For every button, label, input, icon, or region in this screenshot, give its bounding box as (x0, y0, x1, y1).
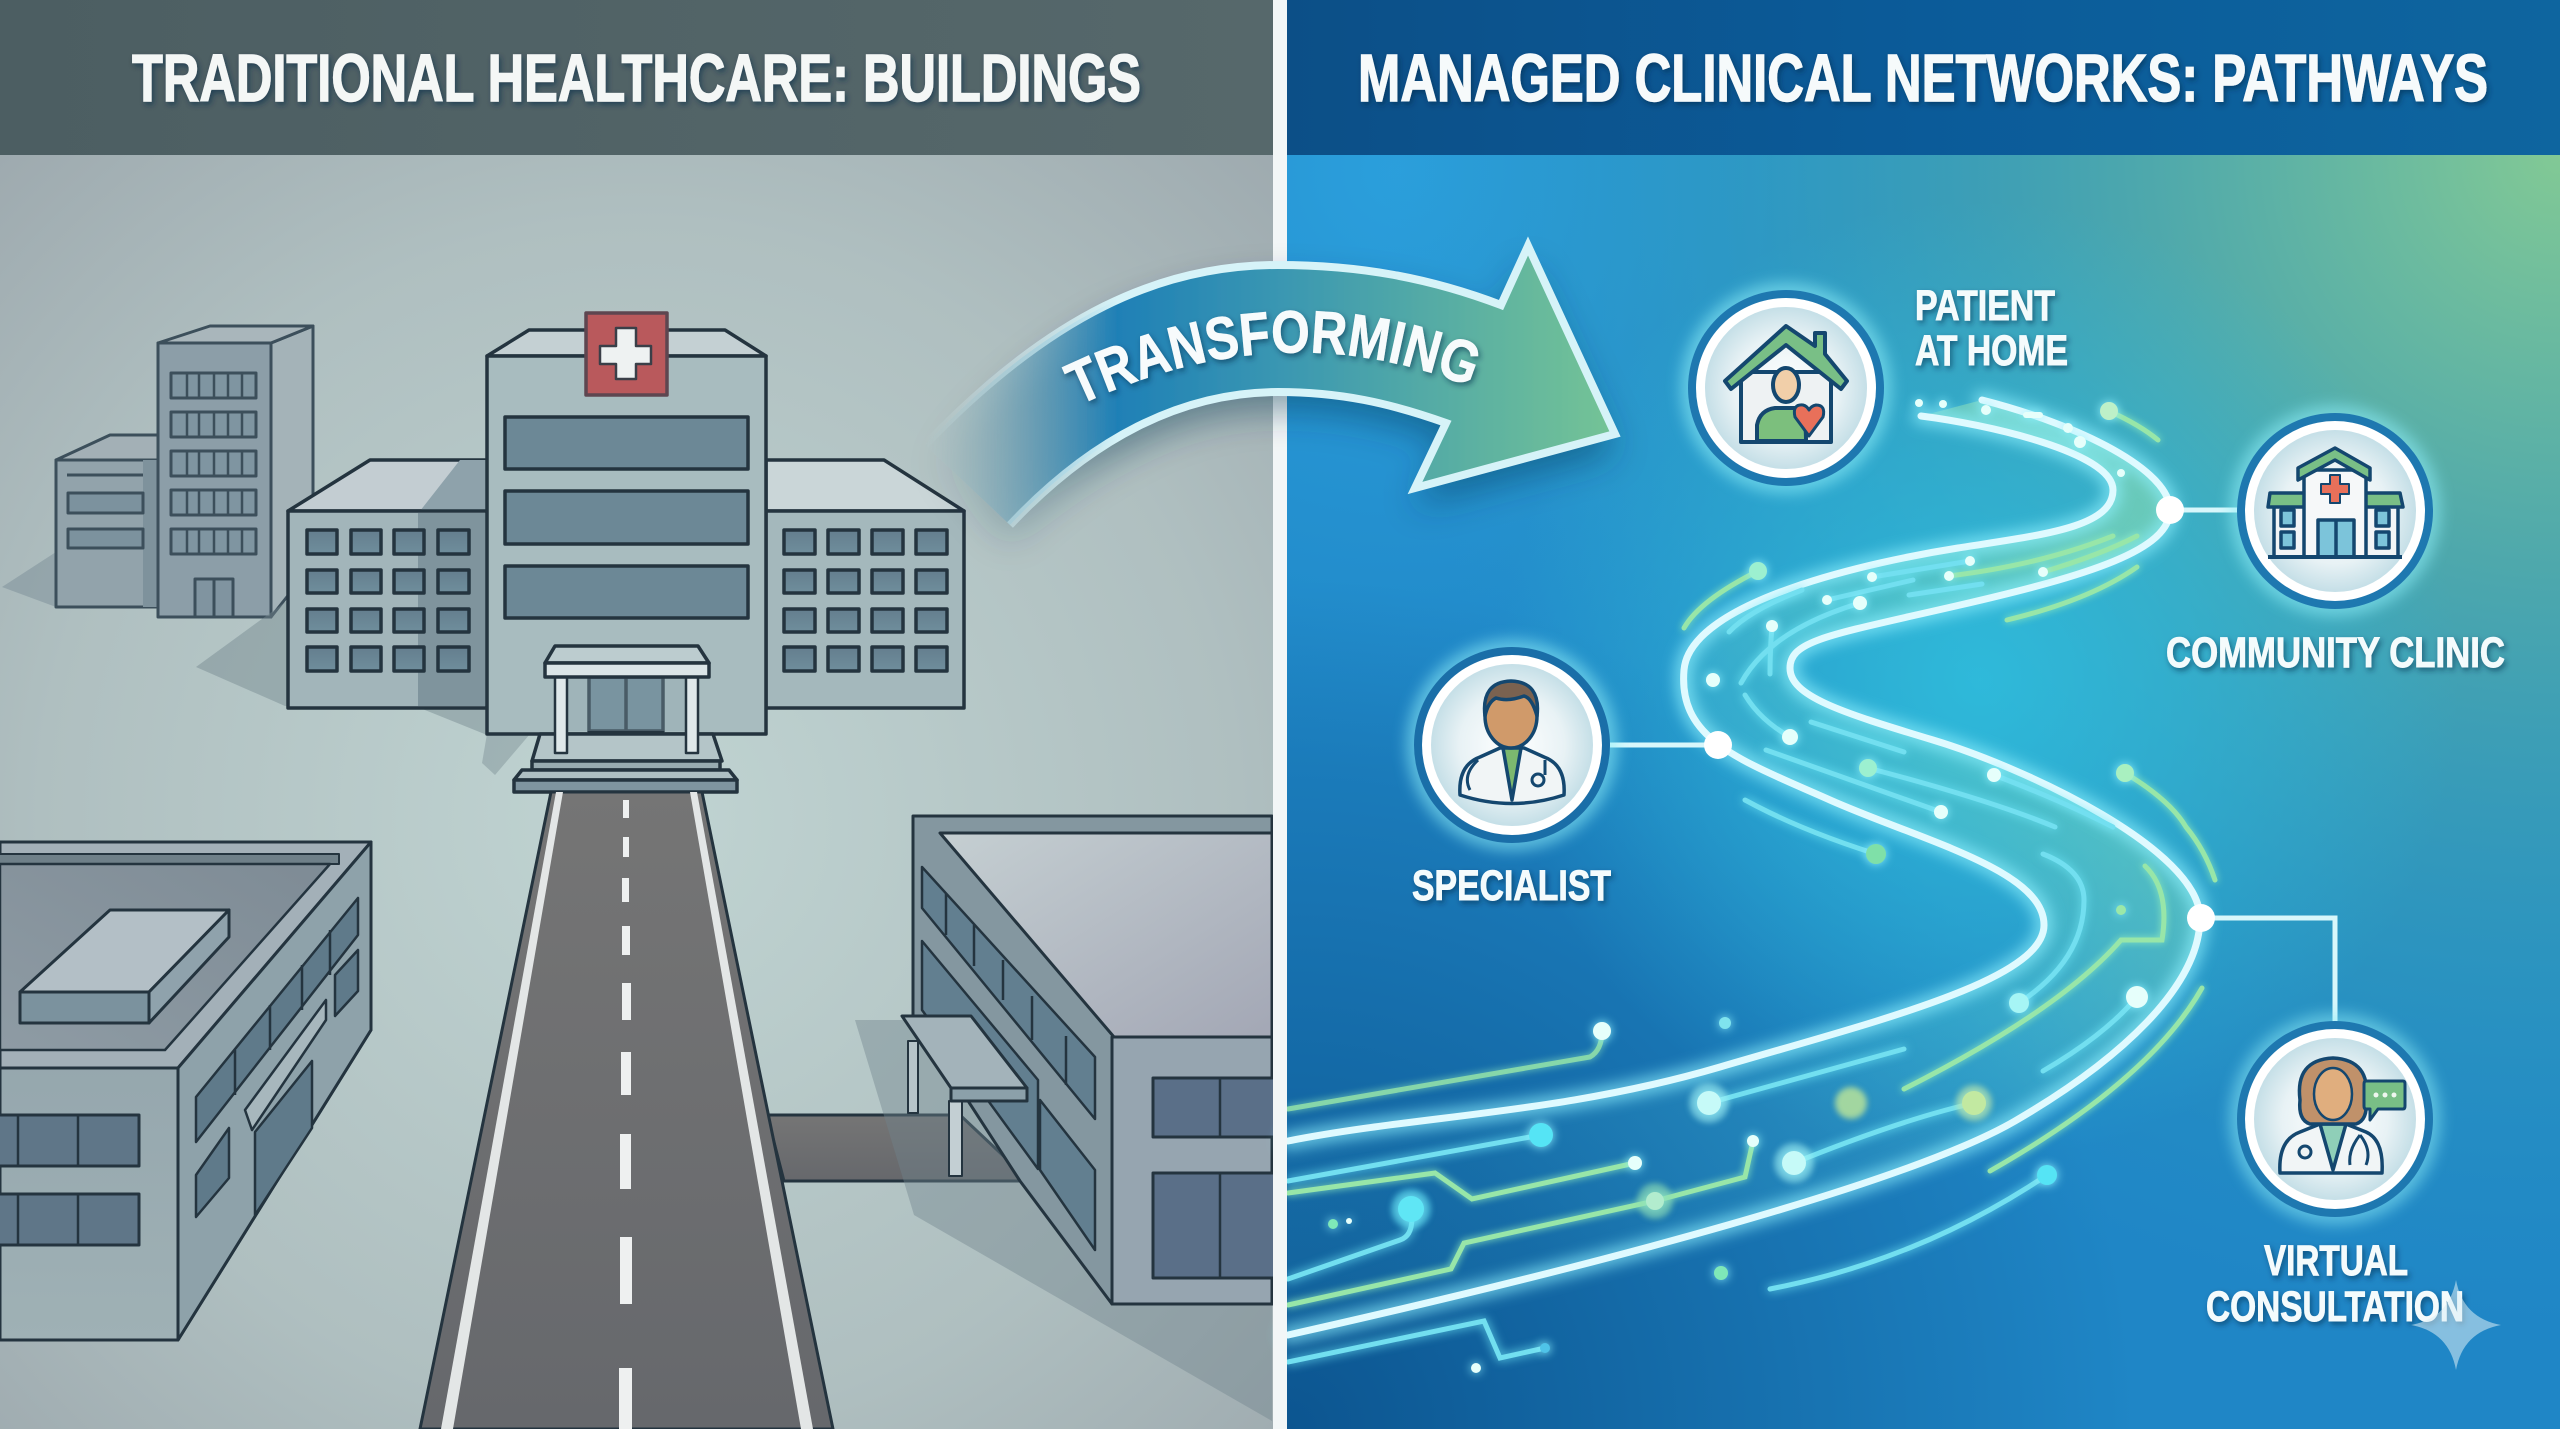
canopy (902, 1016, 1027, 1176)
arrow: transforming (942, 236, 1624, 544)
right wing (766, 460, 964, 708)
label: patient at home: PATIENT (1915, 282, 2055, 330)
central tower (487, 330, 766, 734)
entrance steps (514, 734, 737, 792)
header bar: managed clinical networks (1287, 0, 2560, 155)
node: specialist (1406, 639, 1618, 851)
label: virtual consultation: VIRTUAL (2264, 1237, 2408, 1285)
left wing (288, 460, 487, 708)
entrance portico (545, 646, 709, 753)
panel: traditional healthcare (0, 0, 1278, 1429)
chart: glowing care pathway (1288, 399, 2215, 1373)
side windows (922, 867, 1095, 1250)
label: patient at home (1915, 282, 2068, 375)
connector lines (1610, 510, 2335, 1025)
panel: managed clinical networks (1287, 0, 2560, 1429)
icon: heart (1794, 405, 1824, 436)
cast shadow (196, 511, 487, 735)
icon: house with patient (1725, 326, 1847, 442)
building: foreground right (855, 816, 1278, 1421)
label: virtual consultation: CONSULTATION (2206, 1283, 2464, 1331)
front windows (0, 1115, 139, 1245)
node: community clinic (2229, 405, 2441, 617)
soft glow dots (1391, 1083, 1992, 1229)
pathway dots (1328, 399, 2148, 1373)
divider (1273, 0, 1287, 1429)
icon: clinic building (2268, 448, 2403, 557)
node: virtual consultation (2229, 1013, 2441, 1225)
building: background tower (158, 326, 313, 617)
main strands (1288, 400, 2200, 1335)
icon: sparkle watermark (2411, 1280, 2501, 1370)
roof unit (20, 910, 229, 1023)
building: main hospital (196, 313, 964, 792)
side road (767, 1115, 1030, 1181)
glow under main strands (1288, 400, 2200, 1335)
arrow label: TRANSFORMING (1062, 310, 1484, 406)
node: patient at home (1680, 282, 1892, 494)
icon: chat bubble (2364, 1081, 2405, 1120)
label: patient at home: AT HOME (1915, 327, 2068, 375)
building: background low block (2, 435, 158, 607)
icon: red cross sign (586, 313, 667, 395)
road (420, 792, 1030, 1429)
front windows (1153, 1078, 1278, 1278)
pathway ribbon (1288, 400, 2200, 1335)
pathway nodes (1704, 496, 2215, 932)
header bar: traditional healthcare (0, 0, 1273, 155)
icon: female doctor with chat bubble (2280, 1058, 2405, 1173)
icon: doctor (1460, 681, 1564, 804)
label: virtual consultation (2206, 1237, 2464, 1331)
header bar: traditional healthcare: TRADITIONAL HEALTHCARE: BUILDINGS (132, 41, 1141, 116)
side windows (196, 898, 358, 1217)
building: foreground left (0, 842, 371, 1340)
label: specialist: SPECIALIST (1412, 862, 1611, 910)
data strands (1288, 561, 2137, 1362)
